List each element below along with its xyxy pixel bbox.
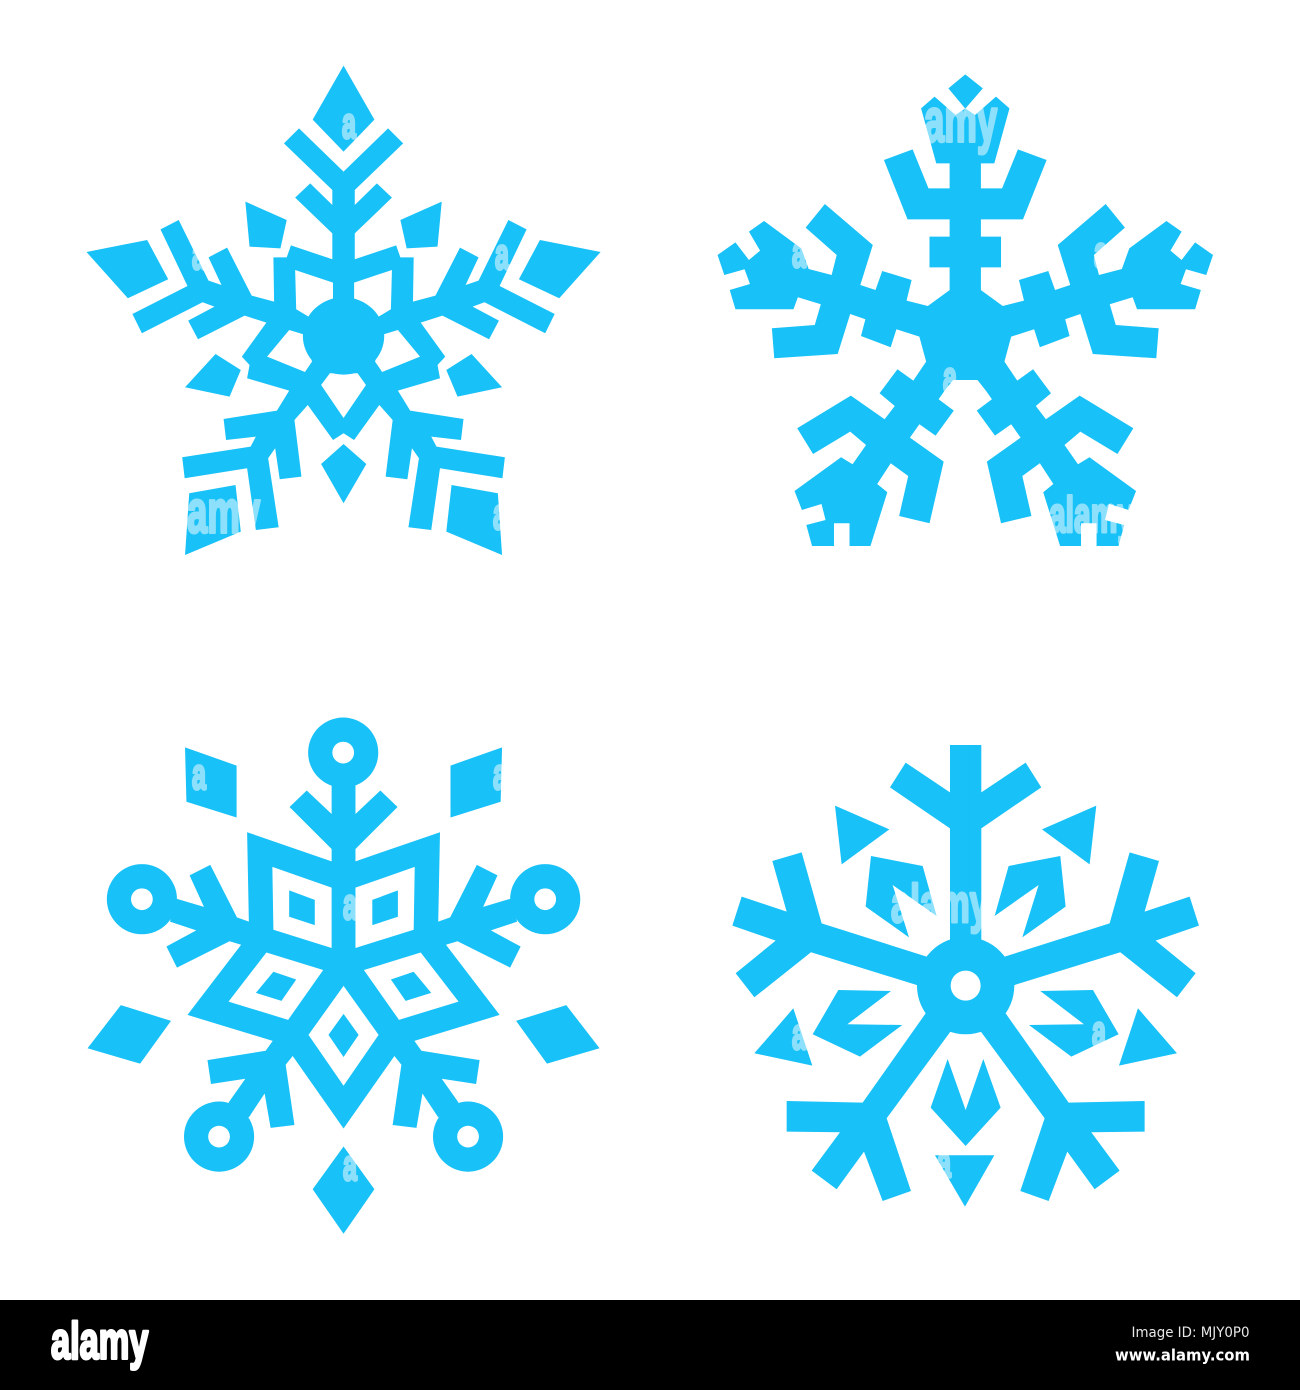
watermark text over the snowflakes: a bbox=[343, 880, 358, 929]
watermark text over the snowflakes: a bbox=[943, 353, 958, 402]
image id: Image ID: MJY0P0 bbox=[1132, 1325, 1250, 1341]
watermark text over the snowflakes: a bbox=[495, 230, 510, 279]
watermark text over the snowflakes: a bbox=[343, 1141, 358, 1190]
website url: www.alamy.com bbox=[1115, 1346, 1250, 1364]
watermark text over the snowflakes: a bbox=[342, 99, 357, 148]
watermark text over the snowflakes: alamy bbox=[891, 873, 989, 934]
footer bar bbox=[0, 1300, 1300, 1390]
watermark text over the snowflakes: amy bbox=[187, 478, 261, 546]
watermark text over the snowflakes: a bbox=[1092, 1007, 1107, 1056]
icon: five-arm snowflake with diamond tips (top left) bbox=[86, 66, 601, 555]
watermark text over the snowflakes: alamy bbox=[1049, 487, 1134, 543]
icon: six-point snowflake with rings and diamonds (bottom left) bbox=[88, 718, 600, 1234]
watermark text over the snowflakes: a bbox=[493, 750, 508, 799]
watermark text over the snowflakes: a bbox=[792, 1010, 807, 1059]
watermark text over the snowflakes: a bbox=[493, 490, 508, 539]
icon: six-point snowflake with forked arms and central ring (bottom right) bbox=[732, 745, 1199, 1207]
watermark text over the snowflakes: a bbox=[192, 230, 207, 279]
watermark text over the snowflakes: a bbox=[1094, 228, 1109, 277]
watermark text over the snowflakes: a bbox=[792, 228, 807, 277]
watermark text over the snowflakes: a bbox=[937, 1138, 952, 1187]
watermark text over the snowflakes: amy bbox=[924, 86, 997, 155]
watermark text over the snowflakes bbox=[187, 86, 1134, 1190]
icon: five-arm snowflake with blocky arms (top right) bbox=[718, 74, 1213, 546]
footer logo: alamy bbox=[51, 1312, 149, 1370]
watermark text over the snowflakes: a bbox=[192, 750, 207, 799]
